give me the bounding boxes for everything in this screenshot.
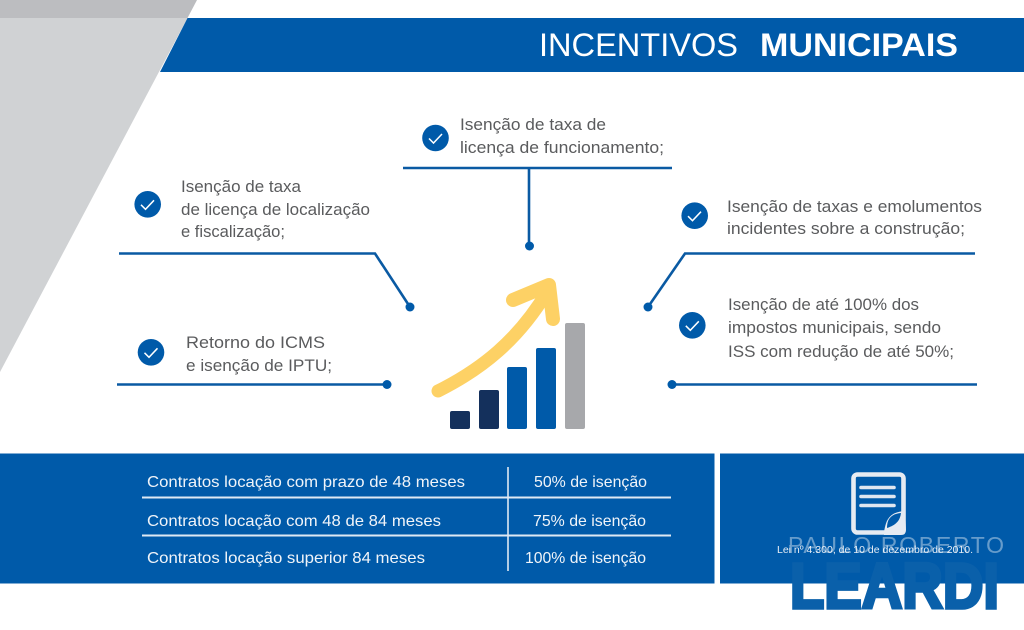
table: exemption values: 75% de isenção: [533, 513, 646, 530]
icon: document: [854, 474, 906, 535]
table: term labels: Contratos locação superior 84 meses: [147, 550, 425, 567]
table: term labels: [147, 474, 465, 567]
watermark: logo: PAULO ROBERTO: [788, 532, 1004, 558]
background: grey diagonal shape: [0, 0, 197, 372]
icon: check right lower: [679, 312, 706, 339]
title: MUNICIPAIS: [760, 27, 958, 63]
icon: check right upper: [681, 202, 708, 229]
connector left lower: [117, 380, 392, 389]
table: exemption values: [525, 474, 647, 567]
item: ICMS e IPTU: [117, 333, 392, 389]
panel: law reference: [720, 454, 1024, 584]
icon: rising yellow arrow: [438, 285, 553, 391]
text: impostos municipais: ISS com redução de até 50%;: [728, 342, 954, 361]
text: law reference: Lei nº 4.300, de 10 de dezembro de 2010.: [777, 544, 973, 556]
table: exemption values: 50% de isenção: [534, 474, 647, 491]
watermark: logo: LEARDI: [790, 550, 999, 622]
connector right lower: [668, 380, 977, 389]
text: licença de localização: Isenção de taxa: [181, 177, 302, 196]
item: licença de funcionamento: [403, 115, 672, 250]
text: licença de funcionamento: licença de funcionamento;: [460, 138, 664, 157]
text: taxas e emolumentos: [727, 197, 982, 238]
text: impostos municipais: Isenção de até 100% dos: [728, 295, 919, 314]
growth bar chart: [450, 323, 585, 429]
text: impostos municipais: [728, 295, 954, 361]
icon: check left lower: [138, 339, 164, 366]
text: licença de funcionamento: [460, 115, 664, 157]
header banner: [160, 18, 1024, 72]
table: exemption values: 100% de isenção: [525, 550, 646, 567]
text: licença de localização: [181, 177, 370, 241]
item: taxas e emolumentos: [644, 197, 982, 312]
text: licença de localização: de licença de localização: [181, 200, 370, 219]
text: licença de localização: e fiscalização;: [181, 222, 285, 241]
item: impostos municipais: [668, 295, 977, 389]
text: ICMS e IPTU: Retorno do ICMS: [186, 333, 325, 352]
title: INCENTIVOS: [539, 27, 738, 63]
text: ICMS e IPTU: [186, 333, 332, 375]
text: taxas e emolumentos: incidentes sobre a construção;: [727, 219, 965, 238]
icon: check left upper: [134, 191, 161, 218]
text: ICMS e IPTU: e isenção de IPTU;: [186, 356, 332, 375]
text: licença de funcionamento: Isenção de taxa de: [460, 115, 606, 134]
item: licença de localização: [119, 177, 414, 312]
table dividers: [142, 467, 671, 571]
table: term labels: Contratos locação com 48 de 84 meses: [147, 513, 441, 530]
text: taxas e emolumentos: Isenção de taxas e emolumentos: [727, 197, 982, 216]
table: term labels: Contratos locação com prazo de 48 meses: [147, 474, 465, 491]
icon: check top: [422, 125, 449, 151]
title: [539, 27, 958, 63]
connector right upper: [644, 254, 975, 312]
connector top: [403, 168, 672, 250]
panel: rental contracts table: [0, 454, 714, 584]
connector left upper: [119, 254, 414, 312]
text: impostos municipais: impostos municipais, sendo: [728, 318, 941, 337]
